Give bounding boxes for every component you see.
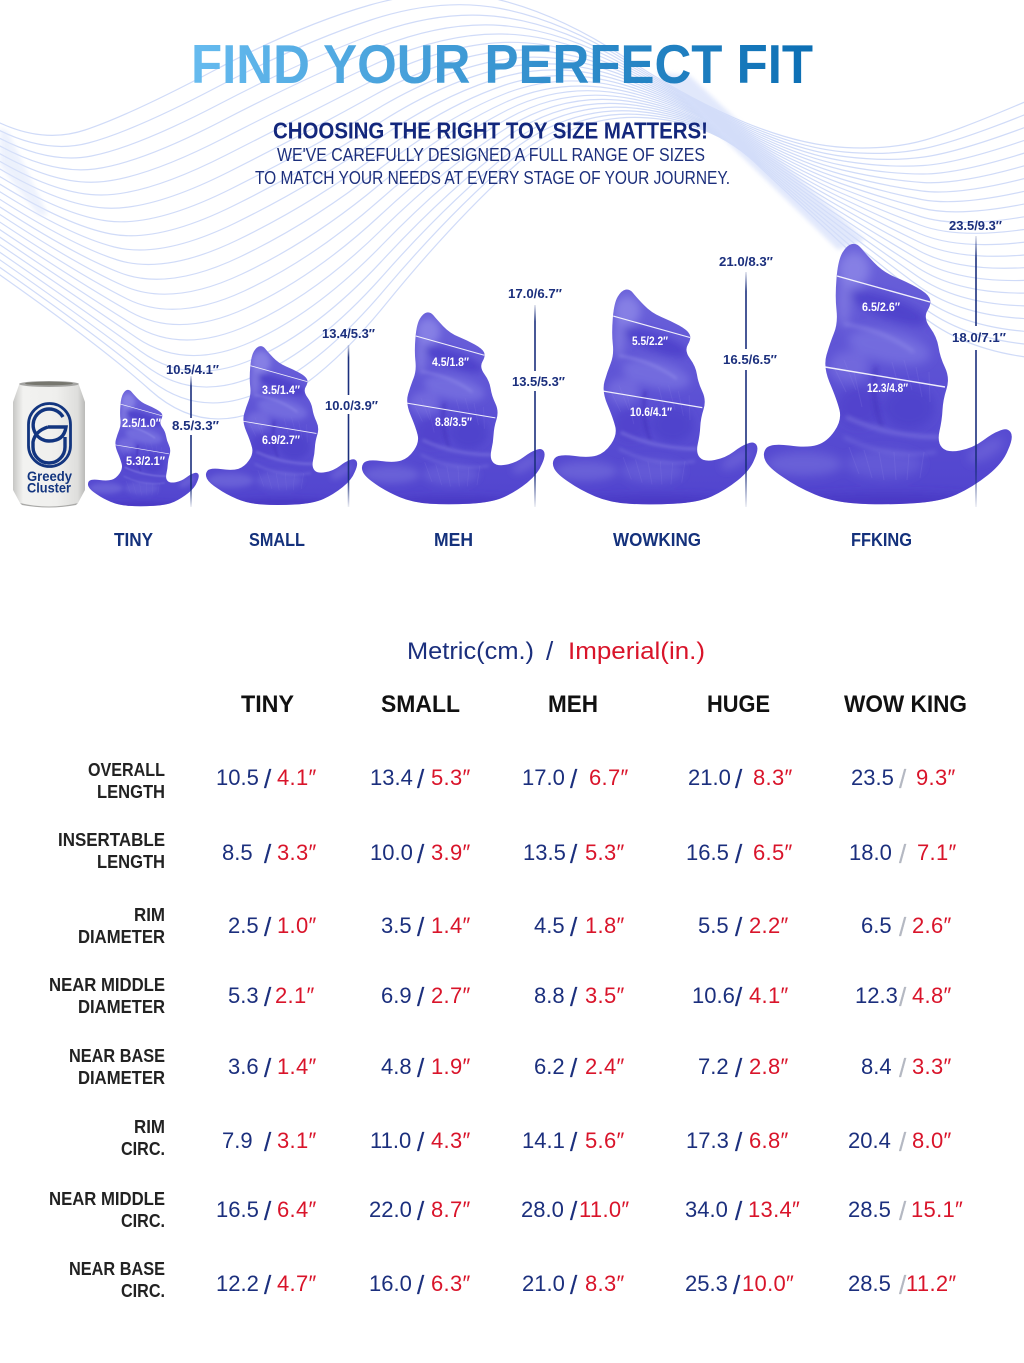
row: rim diameter: / bbox=[417, 912, 425, 942]
table header: TINY bbox=[241, 691, 294, 718]
row: near middle circumference: 13.4″ bbox=[748, 1197, 800, 1222]
row: near base circumference: / bbox=[570, 1270, 578, 1300]
row: near base diameter: / bbox=[899, 1053, 907, 1083]
dimension annotations: TINY bbox=[122, 363, 219, 507]
row: near base circumference: 21.0 bbox=[522, 1271, 565, 1296]
row: rim circumference: / bbox=[570, 1127, 578, 1157]
row: near base diameter: / bbox=[735, 1053, 743, 1083]
row: rim circumference: 6.8″ bbox=[749, 1128, 789, 1153]
row: rim circumference: / bbox=[899, 1127, 907, 1157]
row: rim circumference bbox=[121, 1117, 952, 1159]
row: insertable length: / bbox=[735, 839, 743, 869]
unit legend bbox=[407, 636, 705, 666]
dimension annotations: SMALL: 6.9/2.7″ bbox=[262, 435, 300, 447]
dimension annotations: WOWKING bbox=[630, 255, 777, 507]
dimension annotations: SMALL: 13.4/5.3″ bbox=[322, 327, 375, 341]
row: rim circumference: 7.9 bbox=[222, 1128, 253, 1153]
row: near middle circumference: 16.5 bbox=[216, 1197, 259, 1222]
product figure: SMALL bbox=[206, 346, 357, 508]
row: rim diameter: 1.4″ bbox=[431, 913, 471, 938]
row: near middle diameter: / bbox=[417, 982, 425, 1012]
dimension annotations: MEH: 13.5/5.3″ bbox=[512, 375, 565, 389]
row: rim circumference: 5.6″ bbox=[585, 1128, 625, 1153]
row: near base diameter: / bbox=[417, 1053, 425, 1083]
row: near middle diameter: 12.3 bbox=[855, 983, 898, 1008]
dimension annotations: SMALL: 3.5/1.4″ bbox=[262, 385, 300, 397]
row: near middle circumference: CIRC. bbox=[121, 1211, 165, 1231]
row: near base circumference bbox=[69, 1259, 956, 1301]
row: near base circumference: 10.0″ bbox=[742, 1271, 794, 1296]
row: overall length: 8.3″ bbox=[753, 765, 793, 790]
row: near base circumference: CIRC. bbox=[121, 1281, 165, 1301]
row: near base diameter: 2.8″ bbox=[749, 1054, 789, 1079]
row: near middle circumference: / bbox=[735, 1196, 743, 1226]
row: near base circumference: 8.3″ bbox=[585, 1271, 625, 1296]
dimension annotations: TINY: 8.5/3.3″ bbox=[172, 419, 219, 433]
row: overall length: / bbox=[735, 764, 743, 794]
row: near base diameter: / bbox=[264, 1053, 272, 1083]
row: rim diameter: 5.5 bbox=[698, 913, 729, 938]
row: insertable length: / bbox=[264, 839, 272, 869]
row: near base circumference: / bbox=[733, 1270, 741, 1300]
title: FIND YOUR PERFECT FIT bbox=[191, 33, 813, 95]
dimension annotations: MEH: 4.5/1.8″ bbox=[432, 357, 469, 369]
size names row: TINY bbox=[114, 530, 153, 550]
row: insertable length: / bbox=[570, 839, 578, 869]
size names row: WOWKING bbox=[613, 530, 701, 550]
row: rim diameter: / bbox=[570, 912, 578, 942]
row: near middle diameter: / bbox=[735, 982, 743, 1012]
row: overall length: / bbox=[417, 764, 425, 794]
row: rim circumference: 14.1 bbox=[522, 1128, 565, 1153]
row: near base diameter: NEAR BASE bbox=[69, 1046, 165, 1066]
row: rim diameter: DIAMETER bbox=[78, 927, 165, 947]
row: near base diameter: 3.3″ bbox=[912, 1054, 952, 1079]
row: overall length: 9.3″ bbox=[916, 765, 956, 790]
dimension annotations: FFKING: 6.5/2.6″ bbox=[862, 302, 900, 314]
row: overall length: 21.0 bbox=[688, 765, 731, 790]
row: rim diameter: 1.8″ bbox=[585, 913, 625, 938]
row: rim diameter: RIM bbox=[134, 905, 165, 925]
row: near base circumference: 25.3 bbox=[685, 1271, 728, 1296]
row: overall length: 4.1″ bbox=[277, 765, 317, 790]
row: near base diameter: / bbox=[570, 1053, 578, 1083]
dimension annotations: WOWKING: 5.5/2.2″ bbox=[632, 336, 668, 348]
row: insertable length: LENGTH bbox=[97, 852, 165, 872]
row: near middle diameter: DIAMETER bbox=[78, 997, 165, 1017]
row: near middle circumference: 28.0 bbox=[521, 1197, 564, 1222]
row: overall length: / bbox=[899, 764, 907, 794]
row: near middle circumference: NEAR MIDDLE bbox=[49, 1189, 165, 1209]
unit legend: Metric(cm.) bbox=[407, 638, 534, 665]
subtitle text block bbox=[255, 118, 730, 188]
row: near base circumference: 16.0 bbox=[369, 1271, 412, 1296]
size names row: MEH bbox=[434, 530, 473, 550]
row: near middle circumference: 6.4″ bbox=[277, 1197, 317, 1222]
row: rim diameter: 6.5 bbox=[861, 913, 892, 938]
row: near middle circumference: / bbox=[899, 1196, 907, 1226]
row: overall length bbox=[88, 760, 956, 802]
subtitle text block: WE'VE CAREFULLY DESIGNED A FULL RANGE OF SIZES bbox=[277, 144, 705, 165]
row: near middle diameter: / bbox=[899, 982, 907, 1012]
row: insertable length: 3.3″ bbox=[277, 840, 317, 865]
row: near base circumference: NEAR BASE bbox=[69, 1259, 165, 1279]
row: overall length: 6.7″ bbox=[589, 765, 629, 790]
row: rim diameter: 2.2″ bbox=[749, 913, 789, 938]
row: overall length: 17.0 bbox=[522, 765, 565, 790]
row: rim circumference: RIM bbox=[134, 1117, 165, 1137]
row: near base circumference: 28.5 bbox=[848, 1271, 891, 1296]
dimension annotations: FFKING: 18.0/7.1″ bbox=[952, 331, 1006, 345]
unit legend: / bbox=[546, 636, 554, 666]
table header: MEH bbox=[548, 691, 598, 718]
row: near middle circumference: 8.7″ bbox=[431, 1197, 471, 1222]
row: near base diameter: 3.6 bbox=[228, 1054, 259, 1079]
table header: HUGE bbox=[707, 691, 770, 718]
row: rim circumference: 3.1″ bbox=[277, 1128, 317, 1153]
row: rim diameter: 4.5 bbox=[534, 913, 565, 938]
icon: branded can for scale: Greedy bbox=[27, 469, 72, 484]
row: rim diameter: / bbox=[264, 912, 272, 942]
row: near base diameter: 8.4 bbox=[861, 1054, 892, 1079]
table header bbox=[241, 691, 967, 718]
dimension annotations: TINY: 10.5/4.1″ bbox=[166, 363, 219, 377]
row: insertable length: / bbox=[899, 839, 907, 869]
row: near base diameter: 1.9″ bbox=[431, 1054, 471, 1079]
product figure: TINY bbox=[88, 390, 199, 508]
row: insertable length: INSERTABLE bbox=[58, 830, 165, 850]
row: near middle diameter: 2.1″ bbox=[275, 983, 315, 1008]
dimension annotations: SMALL bbox=[262, 327, 378, 507]
row: rim circumference: 11.0 bbox=[370, 1128, 411, 1153]
dimension annotations: FFKING bbox=[862, 219, 1006, 507]
row: insertable length: 13.5 bbox=[523, 840, 566, 865]
row: near middle diameter: 3.5″ bbox=[585, 983, 625, 1008]
size names row bbox=[114, 530, 912, 550]
row: insertable length: 10.0 bbox=[370, 840, 413, 865]
row: near middle diameter: 10.6 bbox=[692, 983, 735, 1008]
row: rim circumference: / bbox=[735, 1127, 743, 1157]
row: near base diameter: 7.2 bbox=[698, 1054, 729, 1079]
row: near middle diameter: 8.8 bbox=[534, 983, 565, 1008]
row: near middle diameter: 5.3 bbox=[228, 983, 259, 1008]
row: rim circumference: 4.3″ bbox=[431, 1128, 471, 1153]
row: insertable length: 6.5″ bbox=[753, 840, 793, 865]
row: near base circumference: 12.2 bbox=[216, 1271, 259, 1296]
row: near base circumference: / bbox=[899, 1270, 907, 1300]
row: insertable length: 3.9″ bbox=[431, 840, 471, 865]
row: near middle circumference: / bbox=[570, 1196, 578, 1226]
row: near middle diameter: / bbox=[570, 982, 578, 1012]
subtitle text block: TO MATCH YOUR NEEDS AT EVERY STAGE OF YOUR JOURNEY. bbox=[255, 167, 730, 188]
row: overall length: / bbox=[570, 764, 578, 794]
row: near middle circumference: / bbox=[264, 1196, 272, 1226]
row: near middle circumference: 11.0″ bbox=[579, 1197, 629, 1222]
dimension annotations: MEH: 17.0/6.7″ bbox=[508, 287, 562, 301]
dimension annotations: WOWKING: 21.0/8.3″ bbox=[719, 255, 773, 269]
row: near middle diameter: 6.9 bbox=[381, 983, 412, 1008]
row: overall length: / bbox=[264, 764, 272, 794]
icon: branded can for scale bbox=[13, 381, 85, 508]
table header: WOW KING bbox=[844, 691, 967, 718]
row: near base diameter: 1.4″ bbox=[277, 1054, 317, 1079]
product figure: MEH bbox=[362, 312, 545, 508]
dimension annotations: WOWKING: 10.6/4.1″ bbox=[630, 407, 672, 419]
dimension annotations: SMALL: 10.0/3.9″ bbox=[325, 399, 378, 413]
row: insertable length: 7.1″ bbox=[917, 840, 957, 865]
row: insertable length bbox=[58, 830, 957, 872]
row: rim circumference: 8.0″ bbox=[912, 1128, 952, 1153]
dimension annotations: MEH bbox=[432, 287, 565, 507]
row: near base diameter: DIAMETER bbox=[78, 1068, 165, 1088]
row: near middle circumference: 28.5 bbox=[848, 1197, 891, 1222]
row: near middle diameter: NEAR MIDDLE bbox=[49, 975, 165, 995]
dimension annotations: TINY: 2.5/1.0″ bbox=[122, 418, 161, 430]
row: rim diameter bbox=[78, 905, 952, 947]
row: insertable length: 5.3″ bbox=[585, 840, 625, 865]
row: rim circumference: / bbox=[417, 1127, 425, 1157]
row: near base circumference: / bbox=[417, 1270, 425, 1300]
row: near base diameter: 2.4″ bbox=[585, 1054, 625, 1079]
row: rim diameter: 2.6″ bbox=[912, 913, 952, 938]
icon: branded can for scale: Cluster bbox=[27, 480, 72, 496]
size names row: SMALL bbox=[249, 530, 305, 550]
unit legend: Imperial(in.) bbox=[568, 638, 705, 665]
dimension annotations: FFKING: 23.5/9.3″ bbox=[949, 219, 1002, 233]
row: near middle diameter: / bbox=[264, 982, 272, 1012]
subtitle text block: CHOOSING THE RIGHT TOY SIZE MATTERS! bbox=[273, 118, 708, 144]
row: near middle circumference: 34.0 bbox=[685, 1197, 728, 1222]
row: overall length: OVERALL bbox=[88, 760, 165, 780]
table header: SMALL bbox=[381, 691, 460, 718]
product figure: WOWKING bbox=[553, 290, 757, 508]
row: rim circumference: CIRC. bbox=[121, 1139, 165, 1159]
dimension annotations: FFKING: 12.3/4.8″ bbox=[867, 383, 908, 395]
row: overall length: LENGTH bbox=[97, 782, 165, 802]
row: near middle diameter: 4.1″ bbox=[749, 983, 789, 1008]
row: rim diameter: 3.5 bbox=[381, 913, 412, 938]
row: near base circumference: 11.2″ bbox=[906, 1271, 956, 1296]
product figure: FFKING bbox=[764, 244, 1012, 509]
row: insertable length: 8.5 bbox=[222, 840, 253, 865]
dimension annotations: TINY: 5.3/2.1″ bbox=[126, 456, 165, 468]
row: rim circumference: 17.3 bbox=[686, 1128, 729, 1153]
row: near base circumference: / bbox=[264, 1270, 272, 1300]
row: insertable length: / bbox=[417, 839, 425, 869]
row: rim diameter: 2.5 bbox=[228, 913, 259, 938]
row: near middle diameter: 2.7″ bbox=[431, 983, 471, 1008]
dimension annotations: MEH: 8.8/3.5″ bbox=[435, 417, 472, 429]
row: rim diameter: / bbox=[735, 912, 743, 942]
row: near middle circumference bbox=[49, 1189, 963, 1231]
row: rim circumference: / bbox=[264, 1127, 272, 1157]
row: near middle circumference: / bbox=[417, 1196, 425, 1226]
row: overall length: 23.5 bbox=[851, 765, 894, 790]
row: near middle diameter: 4.8″ bbox=[912, 983, 952, 1008]
row: near base diameter bbox=[69, 1046, 952, 1088]
row: near middle circumference: 22.0 bbox=[369, 1197, 412, 1222]
row: near base diameter: 6.2 bbox=[534, 1054, 565, 1079]
row: overall length: 10.5 bbox=[216, 765, 259, 790]
row: overall length: 13.4 bbox=[370, 765, 413, 790]
row: near base diameter: 4.8 bbox=[381, 1054, 412, 1079]
row: insertable length: 18.0 bbox=[849, 840, 892, 865]
row: near middle circumference: 15.1″ bbox=[911, 1197, 963, 1222]
row: rim circumference: 20.4 bbox=[848, 1128, 891, 1153]
row: near base circumference: 6.3″ bbox=[431, 1271, 471, 1296]
size names row: FFKING bbox=[851, 530, 912, 550]
row: near middle diameter bbox=[49, 975, 952, 1017]
dimension annotations: WOWKING: 16.5/6.5″ bbox=[723, 353, 777, 367]
row: overall length: 5.3″ bbox=[431, 765, 471, 790]
row: rim diameter: 1.0″ bbox=[277, 913, 317, 938]
row: insertable length: 16.5 bbox=[686, 840, 729, 865]
row: near base circumference: 4.7″ bbox=[277, 1271, 317, 1296]
row: rim diameter: / bbox=[899, 912, 907, 942]
